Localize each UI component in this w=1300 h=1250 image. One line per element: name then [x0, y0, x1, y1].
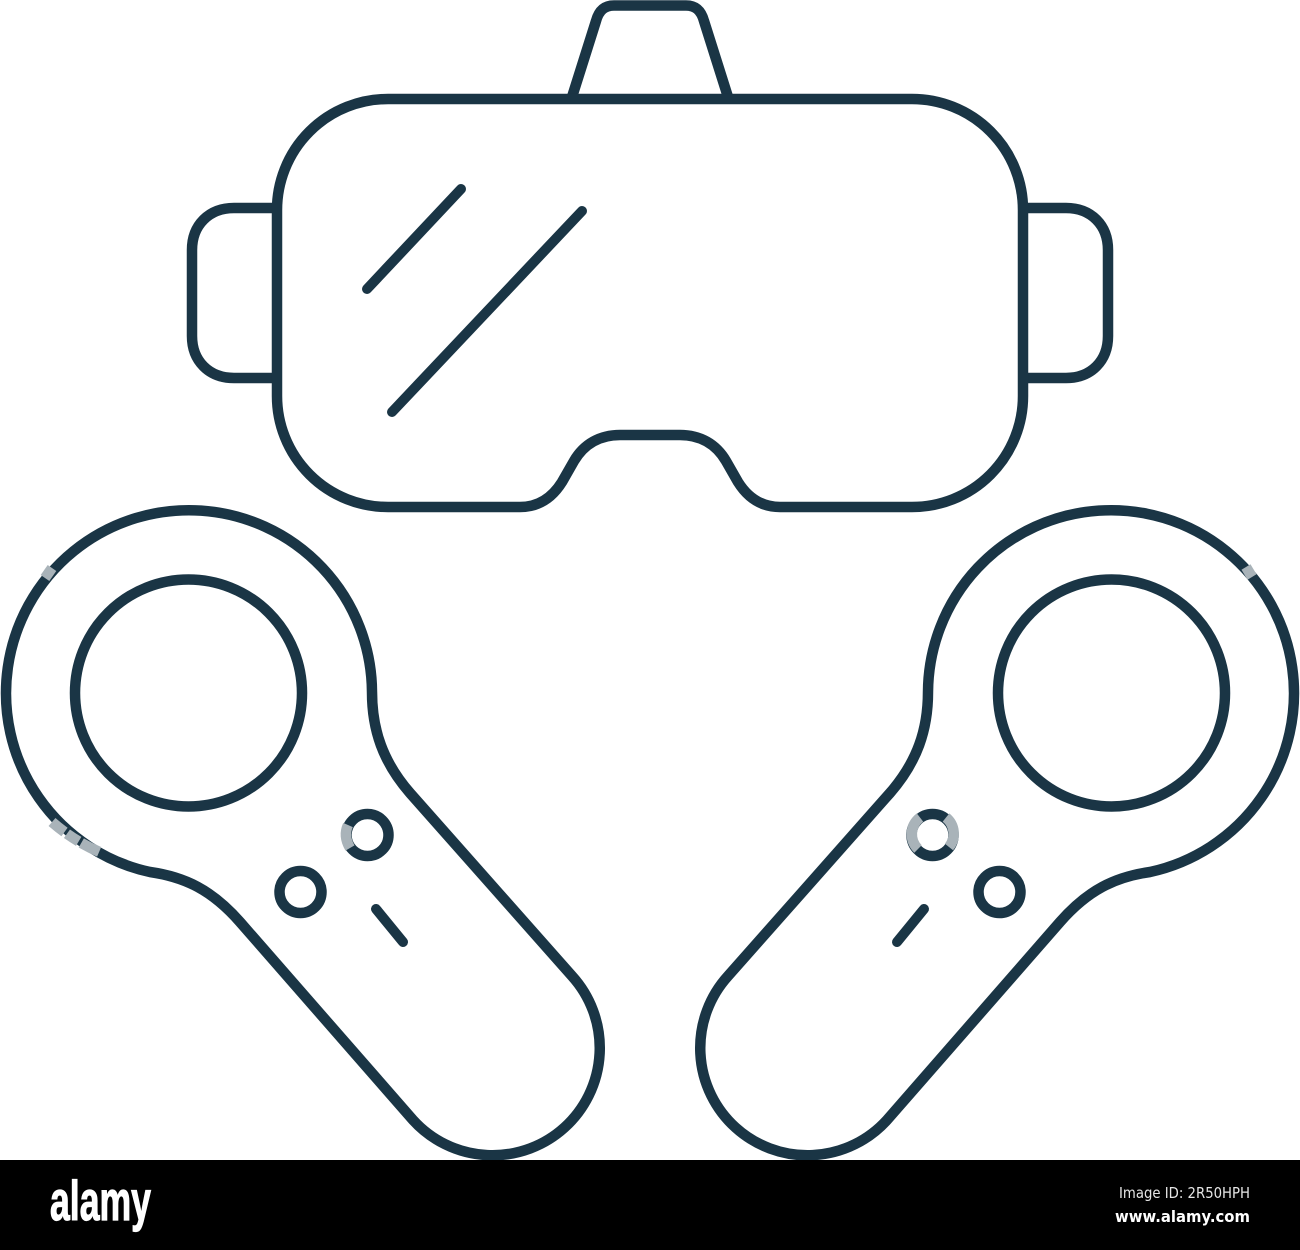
left controller touchpad	[75, 580, 302, 806]
left controller button top	[346, 814, 388, 856]
right controller slot	[897, 909, 924, 942]
icon: VR headset	[192, 6, 1108, 507]
lens reflection short	[367, 189, 461, 289]
lens reflection long	[392, 211, 582, 412]
left controller body	[6, 510, 600, 1155]
right controller touchpad	[998, 580, 1225, 806]
icon: left controller	[6, 510, 600, 1155]
alamy logo wordmark: alamy	[50, 1169, 151, 1232]
right controller button bottom	[978, 871, 1020, 913]
website url: www.alamy.com	[1115, 1207, 1250, 1226]
headset top strap	[572, 6, 728, 97]
left controller button bottom	[280, 871, 322, 913]
icon: right controller	[700, 510, 1294, 1155]
headset body	[277, 99, 1023, 507]
image id: Image ID: 2R50HPH	[1119, 1184, 1250, 1202]
headset right side strap	[1023, 208, 1108, 378]
right controller body	[700, 510, 1294, 1155]
left controller slot	[376, 909, 403, 942]
watermark fragments over strokes	[45, 567, 1252, 853]
footer bar	[0, 1160, 1300, 1250]
headset left side strap	[192, 208, 277, 378]
right controller button top	[912, 814, 954, 856]
